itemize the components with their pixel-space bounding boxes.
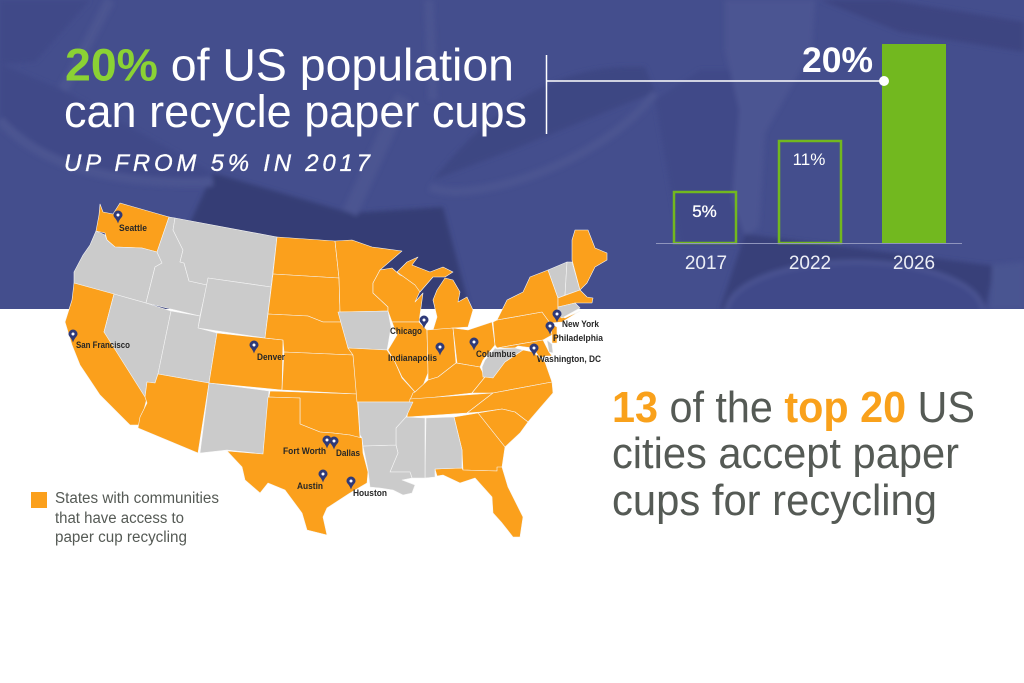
pin: Philadelphia <box>546 322 554 334</box>
year 2022: 2022 <box>789 253 831 274</box>
year 2017: 2017 <box>685 253 727 274</box>
subheading: UP FROM 5% IN 2017 <box>64 150 372 177</box>
pin: Fort Worth <box>322 436 332 448</box>
label: Philadelphia: Philadelphia <box>553 333 603 343</box>
pin: Dallas <box>330 436 338 450</box>
value 11%: 11% <box>793 150 825 169</box>
bar 2017 <box>674 192 736 243</box>
bar 2022 <box>779 141 841 243</box>
callout: 13 of the top 20 US cities <box>612 383 975 525</box>
label: Fort Worth: Fort Worth <box>283 446 326 456</box>
pin: New York <box>552 310 562 322</box>
pin: Columbus <box>470 338 478 350</box>
legend swatch <box>31 492 47 508</box>
label: Chicago: Chicago <box>390 326 423 336</box>
callout: 13 of the top 20 US cities: cities accept paper <box>612 429 959 478</box>
pin: Washington, DC <box>530 344 538 356</box>
label: Indianapolis: Indianapolis <box>388 353 437 363</box>
label: San Francisco: San Francisco <box>76 340 131 350</box>
pin: Austin <box>318 470 328 482</box>
pin: Denver <box>250 340 258 354</box>
US map <box>65 203 607 537</box>
pin: San Francisco <box>68 330 78 342</box>
background: blue panel with paper cups <box>0 0 1024 309</box>
label: New York: New York <box>562 319 599 329</box>
axis <box>656 243 962 244</box>
leader dot <box>879 76 889 86</box>
pin: Indianapolis <box>436 342 444 356</box>
callout: 13 of the top 20 US cities: 13 of the top 20 US <box>612 383 975 432</box>
value 5%: 5% <box>692 202 717 221</box>
bar chart <box>546 41 962 274</box>
label: Denver: Denver <box>257 352 286 362</box>
heading: can recycle paper cups: can recycle paper cups <box>64 86 527 137</box>
label: Austin: Austin <box>297 481 323 491</box>
leader line <box>546 55 884 134</box>
callout: 13 of the top 20 US cities: cups for recycling <box>612 476 937 525</box>
legend text: paper cup recycling <box>55 529 187 546</box>
legend <box>31 490 219 546</box>
pin: Chicago <box>420 316 428 328</box>
legend text: States with communities <box>55 490 219 507</box>
label: Seattle: Seattle <box>119 223 147 233</box>
bar 2026 <box>882 44 946 243</box>
label: Dallas: Dallas <box>336 448 360 458</box>
value 20%: 20% <box>802 41 873 80</box>
pin: Seattle <box>114 210 122 224</box>
heading: 20% of US population: 20% of US population <box>65 40 514 90</box>
legend text: that have access to <box>55 510 184 527</box>
label: Columbus: Columbus <box>476 349 516 359</box>
label: Washington, DC: Washington, DC <box>537 354 602 364</box>
pin: Houston <box>346 476 356 490</box>
label: Houston: Houston <box>353 488 387 498</box>
year 2026: 2026 <box>893 253 935 274</box>
